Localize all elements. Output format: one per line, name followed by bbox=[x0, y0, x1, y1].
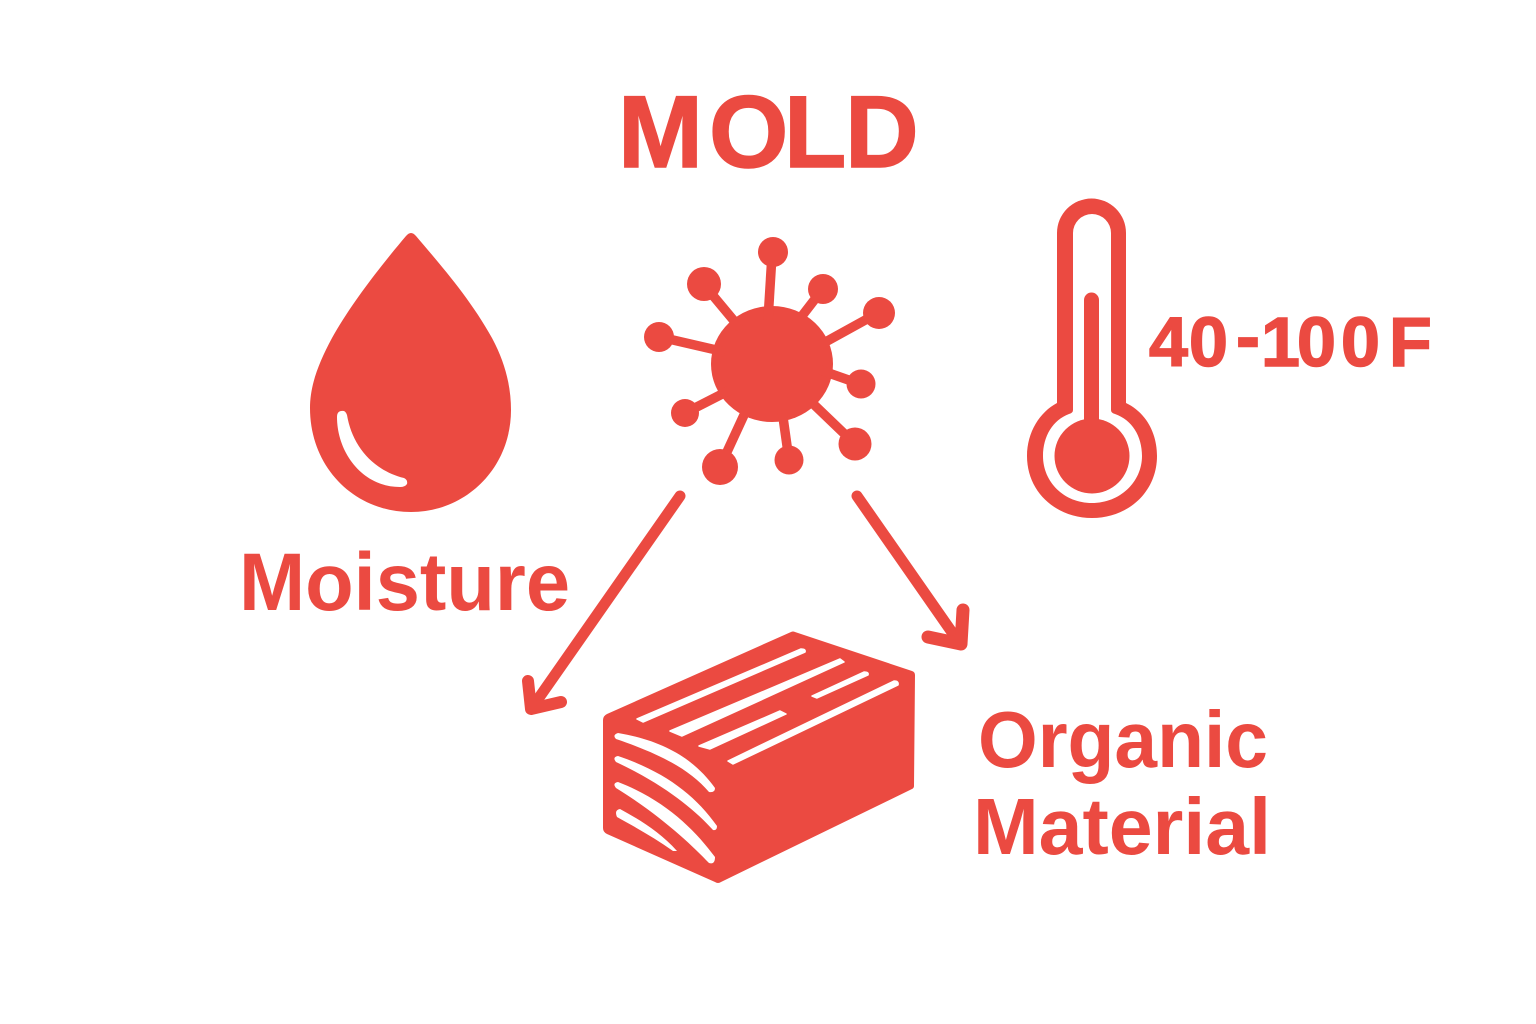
icon: mold spore bbox=[644, 237, 895, 485]
label: organic material bbox=[973, 695, 1271, 871]
label: moisture: Moisture bbox=[239, 537, 570, 628]
label: temperature: F bbox=[1389, 303, 1432, 381]
icon: wood block bbox=[603, 632, 915, 883]
arrow: to organic material bbox=[857, 496, 963, 644]
label: organic material: Organic bbox=[978, 695, 1268, 784]
label: temperature: 100 bbox=[1261, 303, 1380, 381]
icon: water drop bbox=[310, 233, 511, 512]
icon: thermometer bbox=[1027, 199, 1157, 518]
label: organic material: Material bbox=[973, 782, 1271, 871]
label: temperature: - bbox=[1236, 297, 1260, 377]
label: temperature: 40 bbox=[1149, 303, 1228, 381]
arrow: to moisture side bbox=[528, 496, 680, 709]
title: MOLD bbox=[618, 75, 919, 189]
